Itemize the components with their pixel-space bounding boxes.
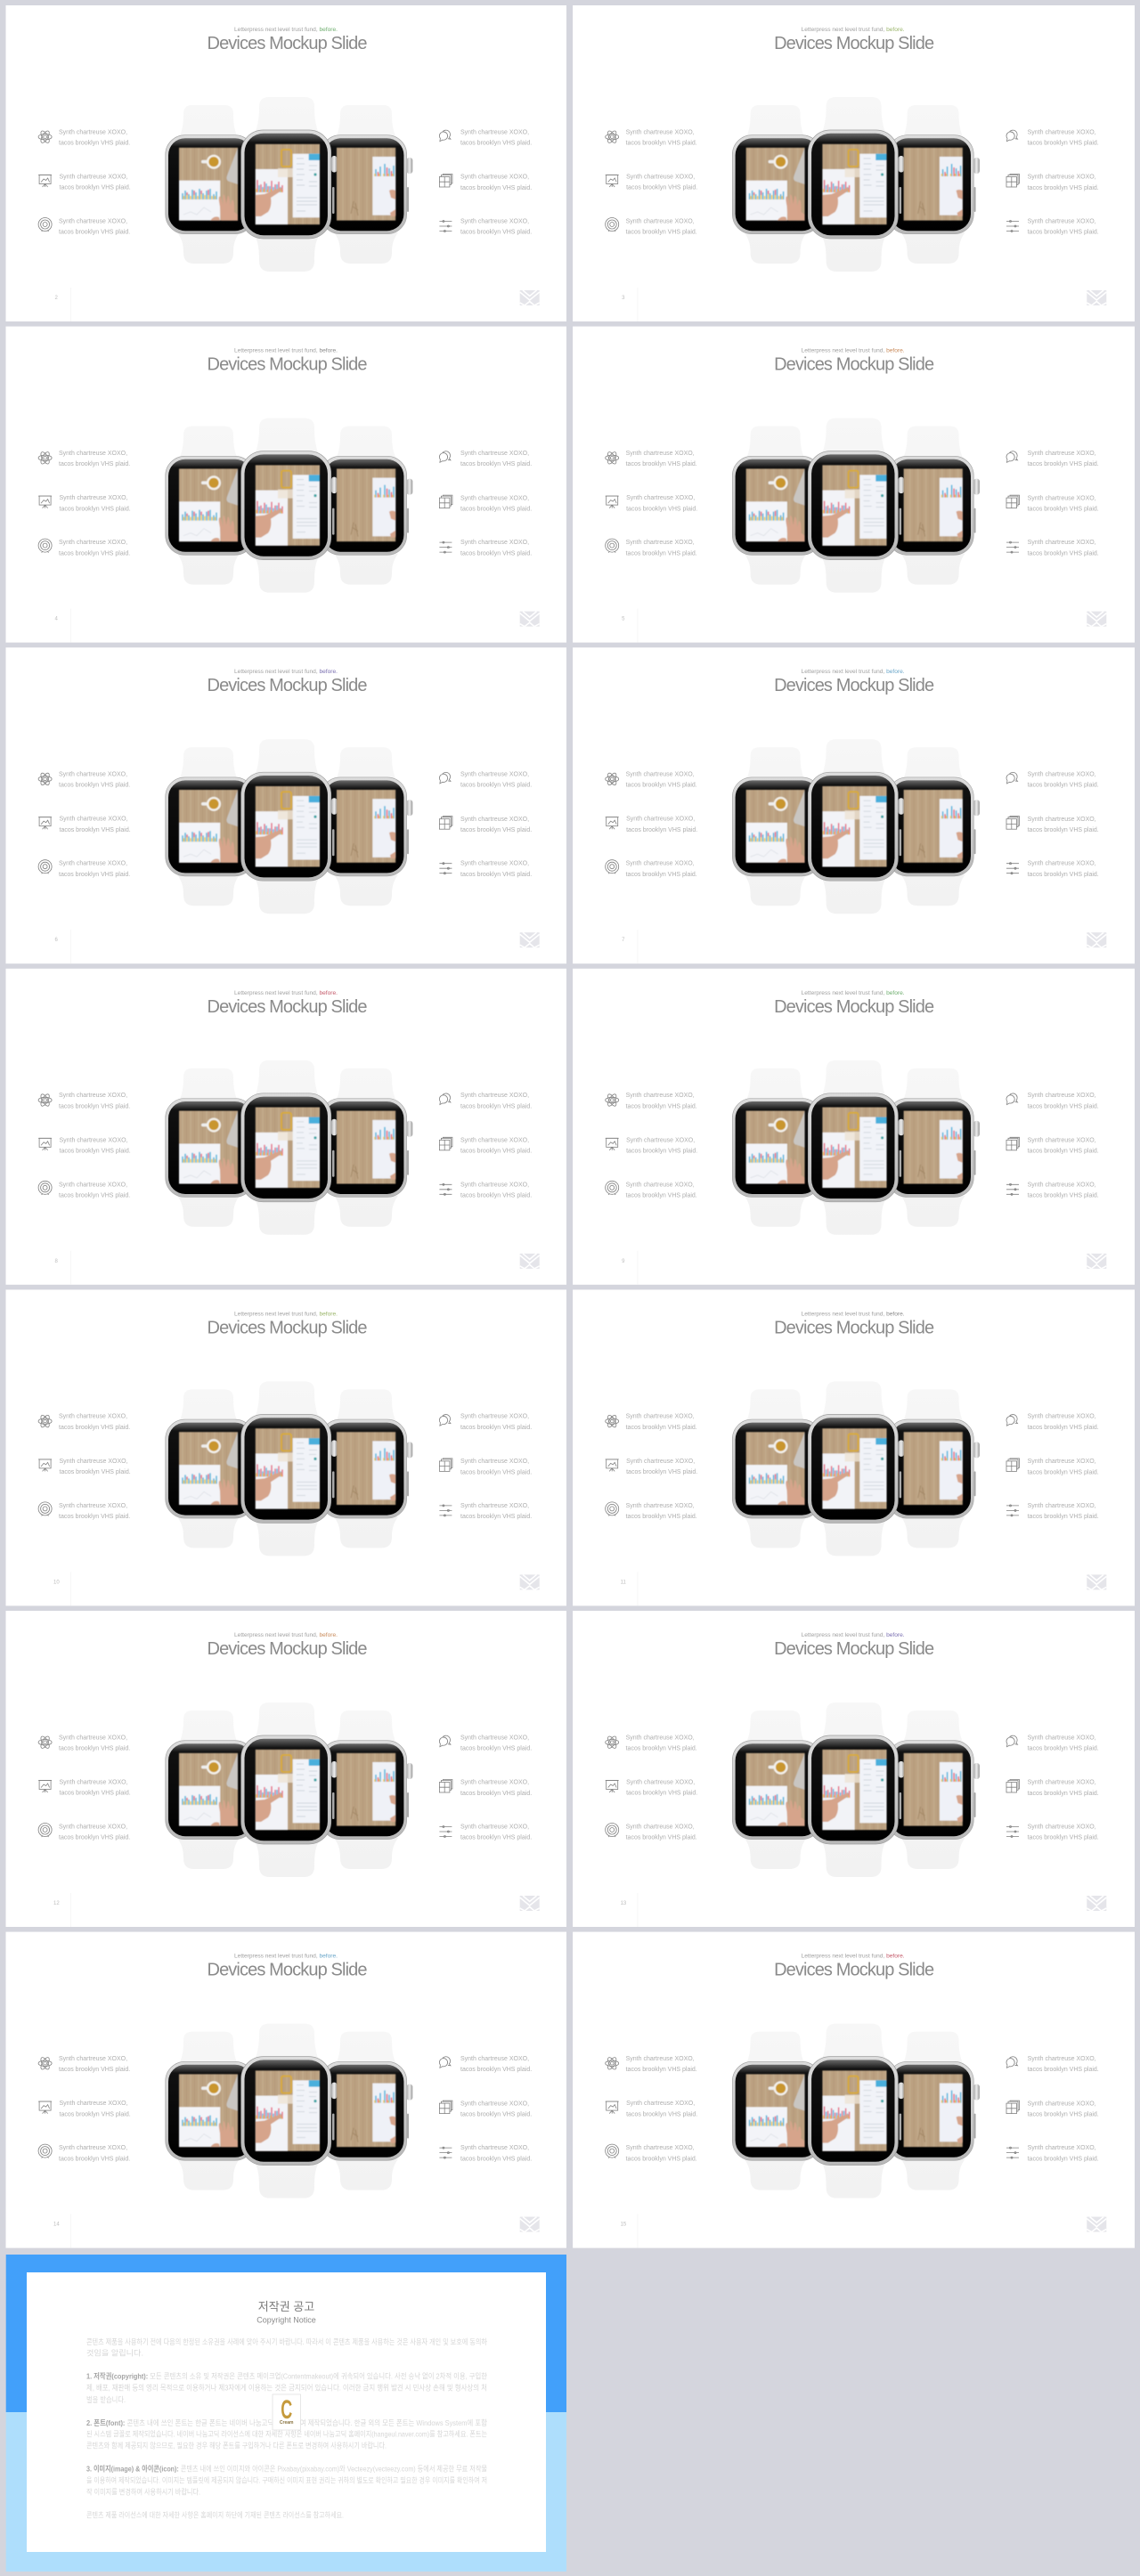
panel: slide 6 xyxy=(5,647,566,963)
panel: slide 4: tacos brooklyn VHS plaid. xyxy=(460,550,532,557)
panel: slide 11: 11 xyxy=(621,1580,626,1585)
subheading: Copyright Notice xyxy=(256,2315,316,2324)
panel: slide 7: Synth chartreuse XOXO, xyxy=(626,817,695,823)
panel: slide 9 xyxy=(573,969,1135,1285)
panel: slide 6: Devices Mockup Slide xyxy=(207,676,367,695)
logo badge xyxy=(273,2394,301,2430)
text block: intro xyxy=(86,2337,487,2357)
text block: intro: 콘텐츠 제품을 사용하기 전에 다음의 한정된 소유권을 사례에 맞아 주시기 바랍니다. 따라서 이 콘텐츠 제품을 사용하는 것은 사용자 개인 및 보호에 동의하 xyxy=(86,2337,487,2346)
panel: slide 9: Synth chartreuse XOXO, xyxy=(1028,1182,1096,1188)
panel: slide 10: Letterpress next level trust fund, before. xyxy=(234,1311,338,1317)
logo badge: C xyxy=(281,2395,292,2425)
text block: intro: 것임을 알립니다. xyxy=(86,2348,143,2357)
panel: slide 12: Letterpress next level trust fund, before. xyxy=(234,1632,338,1638)
panel: slide 4: tacos brooklyn VHS plaid. xyxy=(59,461,130,467)
panel: slide 8: tacos brooklyn VHS plaid. xyxy=(59,1149,131,1155)
text block: right 2: Synth chartreuse XOXO, xyxy=(460,175,529,181)
icon: target xyxy=(38,217,52,232)
panel: slide 15: tacos brooklyn VHS plaid. xyxy=(626,2156,697,2162)
text block: closing line: 콘텐츠 제품 라이선스에 대한 자세한 사항은 홈페이지 하단에 기재된 콘텐츠 라이선스를 참고하세요. xyxy=(86,2511,344,2520)
panel: slide 10: Synth chartreuse XOXO, xyxy=(59,1414,127,1420)
text block: section 3: 3. 이미지(image) & 아이콘(icon): 콘텐츠 내에 쓰인 이미지와 아이콘은 Pixabay(pixabay.com)와 Vecteezy(vecteezy.com) 등에서 제공한 무료 저작물 xyxy=(86,2465,487,2474)
panel: slide 13: Devices Mockup Slide xyxy=(774,1639,934,1659)
text block: section 1: 1. 저작권(copyright): 모든 콘텐츠의 소유 및 저작권은 콘텐츠 메이크업(Contentmakeout)에 귀속되어 있습니다. 사전 승낙 없이 2차적 이용, 구입한 xyxy=(86,2371,487,2380)
panel: slide 9: Devices Mockup Slide xyxy=(774,997,934,1017)
panel: slide 8: Devices Mockup Slide xyxy=(207,997,367,1017)
panel: slide 11: tacos brooklyn VHS plaid. xyxy=(1028,1469,1099,1475)
panel: slide 3: tacos brooklyn VHS plaid. xyxy=(1028,230,1099,236)
panel: slide 13 xyxy=(573,1611,1135,1927)
panel: slide 12: Synth chartreuse XOXO, xyxy=(460,1824,529,1831)
panel: slide 12: Synth chartreuse XOXO, xyxy=(460,1735,529,1741)
icon: atom xyxy=(38,130,52,144)
panel: slide 7: Letterpress next level trust fund, before. xyxy=(802,669,905,675)
panel: slide 11: Synth chartreuse XOXO, xyxy=(1028,1503,1096,1509)
panel: slide 13: 13 xyxy=(621,1901,627,1906)
panel: slide 14: tacos brooklyn VHS plaid. xyxy=(59,2111,131,2117)
panel: slide 9: tacos brooklyn VHS plaid. xyxy=(1028,1103,1099,1109)
panel: slide 11: tacos brooklyn VHS plaid. xyxy=(1028,1514,1099,1520)
panel: slide 12: Synth chartreuse XOXO, xyxy=(460,1780,529,1786)
heading: copyright: 저작권 공고 xyxy=(258,2300,314,2313)
panel: slide 6: Synth chartreuse XOXO, xyxy=(460,771,529,778)
text block: right 3: tacos brooklyn VHS plaid. xyxy=(460,230,532,236)
panel: slide 14: tacos brooklyn VHS plaid. xyxy=(59,2067,130,2073)
panel: slide 3: tacos brooklyn VHS plaid. xyxy=(626,185,697,191)
panel: slide 3: Synth chartreuse XOXO, xyxy=(626,219,695,224)
panel: slide 8: tacos brooklyn VHS plaid. xyxy=(460,1103,532,1109)
panel: slide 7 xyxy=(573,647,1135,963)
panel: slide 12: tacos brooklyn VHS plaid. xyxy=(59,1745,130,1752)
panel: slide 3: tacos brooklyn VHS plaid. xyxy=(626,230,697,236)
panel: slide 13: Synth chartreuse XOXO, xyxy=(626,1779,695,1786)
panel: slide 13: Synth chartreuse XOXO, xyxy=(1028,1824,1096,1831)
panel: slide 6: 6 xyxy=(55,938,59,943)
panel: slide 14 xyxy=(5,1932,566,2248)
panel: slide 3: Synth chartreuse XOXO, xyxy=(626,129,695,135)
panel: slide 12: Synth chartreuse XOXO, xyxy=(59,1735,127,1741)
panel: slide 10: tacos brooklyn VHS plaid. xyxy=(59,1514,130,1520)
panel: slide 9: Synth chartreuse XOXO, xyxy=(1028,1093,1096,1099)
panel: slide 11: tacos brooklyn VHS plaid. xyxy=(626,1469,697,1475)
panel: copyright notice xyxy=(6,2255,566,2572)
panel: slide 4: tacos brooklyn VHS plaid. xyxy=(460,506,532,513)
panel: slide 3: tacos brooklyn VHS plaid. xyxy=(1028,185,1099,191)
subtitle: Letterpress next level trust fund, before. xyxy=(234,27,338,33)
panel: slide 8: Synth chartreuse XOXO, xyxy=(59,1182,127,1188)
panel: slide 14: Synth chartreuse XOXO, xyxy=(59,2056,127,2062)
text block: left 1: tacos brooklyn VHS plaid. xyxy=(59,141,130,146)
panel: slide 5: Synth chartreuse XOXO, xyxy=(1028,495,1096,501)
panel: slide 8: Synth chartreuse XOXO, xyxy=(460,1138,529,1143)
panel: slide 8: tacos brooklyn VHS plaid. xyxy=(460,1193,532,1199)
panel: slide 6: Synth chartreuse XOXO, xyxy=(59,861,127,867)
panel: slide 6: Synth chartreuse XOXO, xyxy=(460,817,529,823)
panel: slide 8 xyxy=(5,969,566,1285)
panel: slide 4: Letterpress next level trust fund, before. xyxy=(234,348,338,354)
panel: slide 13: tacos brooklyn VHS plaid. xyxy=(626,1791,697,1797)
text block: section 2: 콘텐츠와 함께 제공되지 않으므로, 필요한 경우 해당 폰트를 구입하거나 다른 폰트로 변경하여 사용하시기 바랍니다. xyxy=(86,2442,387,2450)
text block: section 3: 작 이미지를 변경하여 사용하시기 바랍니다. xyxy=(86,2488,200,2497)
panel: slide 11: Letterpress next level trust fund, before. xyxy=(802,1311,905,1317)
panel: slide 4: Synth chartreuse XOXO, xyxy=(460,451,529,457)
text block: left 2: tacos brooklyn VHS plaid. xyxy=(59,185,131,191)
panel: slide 13: Synth chartreuse XOXO, xyxy=(1028,1780,1096,1786)
panel: slide 12: Synth chartreuse XOXO, xyxy=(59,1824,127,1831)
panel: slide 10: tacos brooklyn VHS plaid. xyxy=(460,1425,532,1431)
panel: slide 7: tacos brooklyn VHS plaid. xyxy=(1028,783,1099,789)
panel: slide 3: Synth chartreuse XOXO, xyxy=(1028,175,1096,181)
icon: stacked frames xyxy=(439,175,452,187)
panel: slide 12: Devices Mockup Slide xyxy=(207,1639,367,1659)
text block: left 1: Synth chartreuse XOXO, xyxy=(59,129,127,135)
text block: left 3: tacos brooklyn VHS plaid. xyxy=(59,230,130,236)
panel: slide 15: tacos brooklyn VHS plaid. xyxy=(1028,2067,1099,2073)
panel: slide 4: Synth chartreuse XOXO, xyxy=(59,540,127,546)
panel: slide 10: 10 xyxy=(53,1580,60,1585)
panel: slide 14: tacos brooklyn VHS plaid. xyxy=(460,2112,532,2118)
panel: slide 15: tacos brooklyn VHS plaid. xyxy=(626,2067,697,2073)
panel: slide 5 xyxy=(573,327,1135,643)
panel: slide 3: Synth chartreuse XOXO, xyxy=(1028,129,1096,135)
text block: section 2: 된 시스템 글꼴로 제작되었습니다. 네이버 나눔고딕 라이선스에 대한 자세한 사항은 네이버 나눔고딕 홈페이지(hangeul.naver.com)를 참고하세요. 폰트는 xyxy=(86,2430,487,2439)
panel: slide 14: Synth chartreuse XOXO, xyxy=(59,2101,128,2107)
text block: section 1: 벌을 받습니다. xyxy=(86,2395,126,2404)
panel: slide 15 xyxy=(573,1932,1135,2248)
panel: slide 9: Synth chartreuse XOXO, xyxy=(1028,1138,1096,1143)
panel: slide 14: tacos brooklyn VHS plaid. xyxy=(460,2067,532,2073)
panel: slide 2 xyxy=(5,5,566,321)
panel: slide 15: Synth chartreuse XOXO, xyxy=(626,2145,695,2151)
panel: slide 12: 12 xyxy=(53,1901,60,1906)
panel: slide 5: Synth chartreuse XOXO, xyxy=(626,495,695,501)
panel: slide 7: tacos brooklyn VHS plaid. xyxy=(626,783,697,789)
panel: slide 15: Synth chartreuse XOXO, xyxy=(1028,2056,1096,2062)
panel: slide 6: tacos brooklyn VHS plaid. xyxy=(460,783,532,789)
panel: slide 9: Synth chartreuse XOXO, xyxy=(626,1182,695,1188)
panel: slide 13: Synth chartreuse XOXO, xyxy=(626,1824,695,1831)
panel: slide 7: 7 xyxy=(622,938,625,943)
text block: section 1: 제, 배포, 재판매 등의 영리 목적으로 이용하거나 제3자에게 이용하는 것은 금지되어 있습니다. 이러한 금지 행위 발견 시 민사상 손해 및 형사상의 처 xyxy=(86,2383,487,2392)
panel: slide 7: Synth chartreuse XOXO, xyxy=(1028,817,1096,823)
panel: slide 5: tacos brooklyn VHS plaid. xyxy=(626,550,697,557)
panel: slide 13: Synth chartreuse XOXO, xyxy=(626,1735,695,1741)
panel: slide 4: 4 xyxy=(55,617,59,622)
panel: slide 9: 9 xyxy=(622,1259,625,1264)
panel: slide 8: Synth chartreuse XOXO, xyxy=(59,1137,128,1143)
panel: slide 10: tacos brooklyn VHS plaid. xyxy=(460,1469,532,1475)
panel: slide 7: Synth chartreuse XOXO, xyxy=(626,861,695,867)
title: Devices Mockup Slide xyxy=(207,34,367,53)
panel: slide 7: Devices Mockup Slide xyxy=(774,676,934,695)
panel: slide 8: tacos brooklyn VHS plaid. xyxy=(59,1193,130,1199)
panel: slide 9: tacos brooklyn VHS plaid. xyxy=(1028,1193,1099,1199)
panel: slide 15: tacos brooklyn VHS plaid. xyxy=(1028,2156,1099,2162)
panel: slide 4: Synth chartreuse XOXO, xyxy=(59,451,127,457)
panel: slide 14: tacos brooklyn VHS plaid. xyxy=(460,2156,532,2162)
panel: slide 5: 5 xyxy=(622,617,625,622)
panel: slide 13: tacos brooklyn VHS plaid. xyxy=(1028,1791,1099,1797)
panel: slide 4: Synth chartreuse XOXO, xyxy=(460,495,529,501)
panel: slide 14: Synth chartreuse XOXO, xyxy=(460,2145,529,2151)
text block: section 1 xyxy=(86,2371,487,2404)
panel: slide 3: Letterpress next level trust fund, before. xyxy=(802,27,905,33)
panel: slide 6: Letterpress next level trust fund, before. xyxy=(234,669,338,675)
panel: slide 9: Letterpress next level trust fund, before. xyxy=(802,990,905,996)
panel: slide 12: tacos brooklyn VHS plaid. xyxy=(460,1745,532,1752)
panel: slide 5: tacos brooklyn VHS plaid. xyxy=(1028,461,1099,467)
panel: slide 3: tacos brooklyn VHS plaid. xyxy=(1028,141,1099,146)
icon: sliders xyxy=(439,221,452,232)
panel: slide 13: tacos brooklyn VHS plaid. xyxy=(1028,1835,1099,1841)
panel: slide 7: tacos brooklyn VHS plaid. xyxy=(626,872,697,878)
panel: slide 5: Synth chartreuse XOXO, xyxy=(626,540,695,546)
panel: slide 14: Letterpress next level trust fund, before. xyxy=(234,1954,338,1960)
panel: slide 4: tacos brooklyn VHS plaid. xyxy=(59,550,130,557)
watch mockups xyxy=(166,97,412,272)
panel: slide 6: tacos brooklyn VHS plaid. xyxy=(460,872,532,878)
page number: 2 xyxy=(55,296,59,301)
panel: slide 7: tacos brooklyn VHS plaid. xyxy=(1028,872,1099,878)
panel: slide 7: tacos brooklyn VHS plaid. xyxy=(1028,827,1099,833)
panel: slide 9: Synth chartreuse XOXO, xyxy=(626,1137,695,1143)
panel: slide 6: tacos brooklyn VHS plaid. xyxy=(59,783,130,789)
panel: slide 5: tacos brooklyn VHS plaid. xyxy=(1028,550,1099,557)
panel: slide 8: Synth chartreuse XOXO, xyxy=(460,1182,529,1188)
panel: slide 3 xyxy=(573,5,1135,321)
panel: slide 3: tacos brooklyn VHS plaid. xyxy=(626,141,697,146)
panel: slide 10: Synth chartreuse XOXO, xyxy=(59,1503,127,1509)
panel: slide 10: Synth chartreuse XOXO, xyxy=(460,1503,529,1509)
panel: slide 15: Devices Mockup Slide xyxy=(774,1961,934,1980)
panel: slide 10 xyxy=(5,1289,566,1605)
panel: slide 14: Synth chartreuse XOXO, xyxy=(460,2056,529,2062)
panel: slide 11 xyxy=(573,1289,1135,1605)
panel: slide 10: Synth chartreuse XOXO, xyxy=(59,1459,128,1465)
panel: slide 7: Synth chartreuse XOXO, xyxy=(1028,861,1096,867)
panel: slide 8: Letterpress next level trust fund, before. xyxy=(234,990,338,996)
panel: slide 12: tacos brooklyn VHS plaid. xyxy=(59,1791,131,1797)
panel: slide 11: tacos brooklyn VHS plaid. xyxy=(1028,1425,1099,1431)
panel: slide 8: Synth chartreuse XOXO, xyxy=(59,1093,127,1099)
panel: slide 12: tacos brooklyn VHS plaid. xyxy=(460,1835,532,1841)
panel: slide 8: Synth chartreuse XOXO, xyxy=(460,1093,529,1099)
panel: slide 6: tacos brooklyn VHS plaid. xyxy=(59,827,131,833)
panel: slide 14: tacos brooklyn VHS plaid. xyxy=(59,2156,130,2162)
panel: slide 7: tacos brooklyn VHS plaid. xyxy=(626,827,697,833)
panel: slide 7: Synth chartreuse XOXO, xyxy=(1028,771,1096,778)
panel: slide 14: 14 xyxy=(53,2223,60,2228)
text block: left 3: Synth chartreuse XOXO, xyxy=(59,219,127,224)
panel: slide 12: tacos brooklyn VHS plaid. xyxy=(59,1835,130,1841)
panel: slide 6: tacos brooklyn VHS plaid. xyxy=(460,827,532,833)
panel: slide 10: Devices Mockup Slide xyxy=(207,1318,367,1337)
panel: slide 10: tacos brooklyn VHS plaid. xyxy=(59,1469,131,1475)
panel: slide 11: Devices Mockup Slide xyxy=(774,1318,934,1337)
panel: slide 5: Devices Mockup Slide xyxy=(774,355,934,375)
text block: right 1: tacos brooklyn VHS plaid. xyxy=(460,141,532,146)
panel: slide 15: Synth chartreuse XOXO, xyxy=(626,2101,695,2107)
panel: slide 5: tacos brooklyn VHS plaid. xyxy=(1028,506,1099,513)
panel: slide 9: tacos brooklyn VHS plaid. xyxy=(1028,1149,1099,1155)
panel: slide 13: tacos brooklyn VHS plaid. xyxy=(626,1745,697,1752)
panel: slide 15: Synth chartreuse XOXO, xyxy=(1028,2101,1096,2107)
panel: slide 10: tacos brooklyn VHS plaid. xyxy=(59,1425,130,1431)
panel: slide 3: 3 xyxy=(622,296,625,301)
panel: slide 4: Devices Mockup Slide xyxy=(207,355,367,375)
panel: slide 4: Synth chartreuse XOXO, xyxy=(59,495,128,501)
panel: slide 12: Synth chartreuse XOXO, xyxy=(59,1779,128,1786)
panel: slide 4 xyxy=(5,327,566,643)
panel: slide 14: Devices Mockup Slide xyxy=(207,1961,367,1980)
panel: slide 15: tacos brooklyn VHS plaid. xyxy=(626,2111,697,2117)
panel: slide 6: Synth chartreuse XOXO, xyxy=(59,771,127,778)
panel: slide 4: tacos brooklyn VHS plaid. xyxy=(460,461,532,467)
panel: slide 10: Synth chartreuse XOXO, xyxy=(460,1414,529,1420)
panel: slide 8: tacos brooklyn VHS plaid. xyxy=(460,1149,532,1155)
panel: slide 3: Synth chartreuse XOXO, xyxy=(1028,219,1096,224)
panel: slide 11: Synth chartreuse XOXO, xyxy=(626,1503,695,1509)
panel: slide 13: tacos brooklyn VHS plaid. xyxy=(626,1835,697,1841)
panel: slide 11: tacos brooklyn VHS plaid. xyxy=(626,1514,697,1520)
panel: slide 15: Synth chartreuse XOXO, xyxy=(1028,2145,1096,2151)
panel: slide 6: tacos brooklyn VHS plaid. xyxy=(59,872,130,878)
panel: slide 11: Synth chartreuse XOXO, xyxy=(626,1414,695,1420)
panel: slide 4: Synth chartreuse XOXO, xyxy=(460,540,529,546)
panel: slide 3: Devices Mockup Slide xyxy=(774,34,934,53)
text block: section 2: 2. 폰트(font): 콘텐츠 내에 쓰인 폰트는 한글 폰트는 네이버 나눔고딕을 사용하여 제작되었습니다. 한글 외의 모든 폰트는 Windows System에 포함 xyxy=(86,2418,487,2427)
panel: slide 5: tacos brooklyn VHS plaid. xyxy=(626,461,697,467)
panel: slide 12: tacos brooklyn VHS plaid. xyxy=(460,1791,532,1797)
text block: section 2 xyxy=(86,2418,487,2450)
panel: slide 6: Synth chartreuse XOXO, xyxy=(460,861,529,867)
text block: section 3 xyxy=(86,2465,487,2497)
text block: section 3: 을 이용하여 제작되었습니다. 이미지는 템플릿에 제공되지 않습니다. 구매하신 이미지 표현 권리는 귀하의 별도로 확인하고 필요한 경우 이미지를 확인하여 저 xyxy=(86,2476,487,2485)
panel: slide 13: Synth chartreuse XOXO, xyxy=(1028,1735,1096,1741)
panel: slide 10: tacos brooklyn VHS plaid. xyxy=(460,1514,532,1520)
panel: slide 13: tacos brooklyn VHS plaid. xyxy=(1028,1745,1099,1752)
panel: slide 11: Synth chartreuse XOXO, xyxy=(626,1459,695,1465)
panel: slide 12 xyxy=(5,1611,566,1927)
icon: presentation board xyxy=(38,175,52,187)
text block: right 1: Synth chartreuse XOXO, xyxy=(460,129,529,135)
panel: slide 4: tacos brooklyn VHS plaid. xyxy=(59,506,131,512)
panel: slide 7: Synth chartreuse XOXO, xyxy=(626,771,695,778)
logo badge: Cream xyxy=(280,2420,294,2426)
panel: slide 9: tacos brooklyn VHS plaid. xyxy=(626,1103,697,1109)
panel: slide 15: Synth chartreuse XOXO, xyxy=(626,2056,695,2062)
panel: slide 11: Synth chartreuse XOXO, xyxy=(1028,1414,1096,1420)
logo xyxy=(520,290,540,305)
panel: slide 5: tacos brooklyn VHS plaid. xyxy=(626,506,697,512)
icon: chat bubbles xyxy=(439,130,451,142)
panel: slide 5: Synth chartreuse XOXO, xyxy=(1028,451,1096,457)
panel: slide 8: 8 xyxy=(55,1259,59,1264)
panel: slide 15: tacos brooklyn VHS plaid. xyxy=(1028,2112,1099,2118)
panel: slide 14: Synth chartreuse XOXO, xyxy=(59,2145,127,2151)
panel: slide 8: tacos brooklyn VHS plaid. xyxy=(59,1103,130,1109)
panel: slide 14: Synth chartreuse XOXO, xyxy=(460,2101,529,2107)
panel: slide 13: Letterpress next level trust fund, before. xyxy=(802,1632,905,1638)
text block: left 2: Synth chartreuse XOXO, xyxy=(59,175,128,180)
panel: slide 9: tacos brooklyn VHS plaid. xyxy=(626,1149,697,1155)
text block: right 3: Synth chartreuse XOXO, xyxy=(460,219,529,224)
panel: slide 11: tacos brooklyn VHS plaid. xyxy=(626,1425,697,1431)
panel: slide 9: tacos brooklyn VHS plaid. xyxy=(626,1193,697,1199)
text block: right 2: tacos brooklyn VHS plaid. xyxy=(460,185,532,191)
panel: slide 10: Synth chartreuse XOXO, xyxy=(460,1459,529,1465)
panel: slide 9: Synth chartreuse XOXO, xyxy=(626,1093,695,1099)
panel: slide 11: Synth chartreuse XOXO, xyxy=(1028,1459,1096,1465)
panel: slide 5: Synth chartreuse XOXO, xyxy=(1028,540,1096,546)
panel: slide 15: 15 xyxy=(621,2223,627,2228)
panel: slide 6: Synth chartreuse XOXO, xyxy=(59,817,128,823)
panel: slide 5: Letterpress next level trust fund, before. xyxy=(802,348,905,354)
panel: slide 5: Synth chartreuse XOXO, xyxy=(626,451,695,457)
panel: slide 3: Synth chartreuse XOXO, xyxy=(626,175,695,180)
panel: slide 15: Letterpress next level trust fund, before. xyxy=(802,1954,905,1960)
